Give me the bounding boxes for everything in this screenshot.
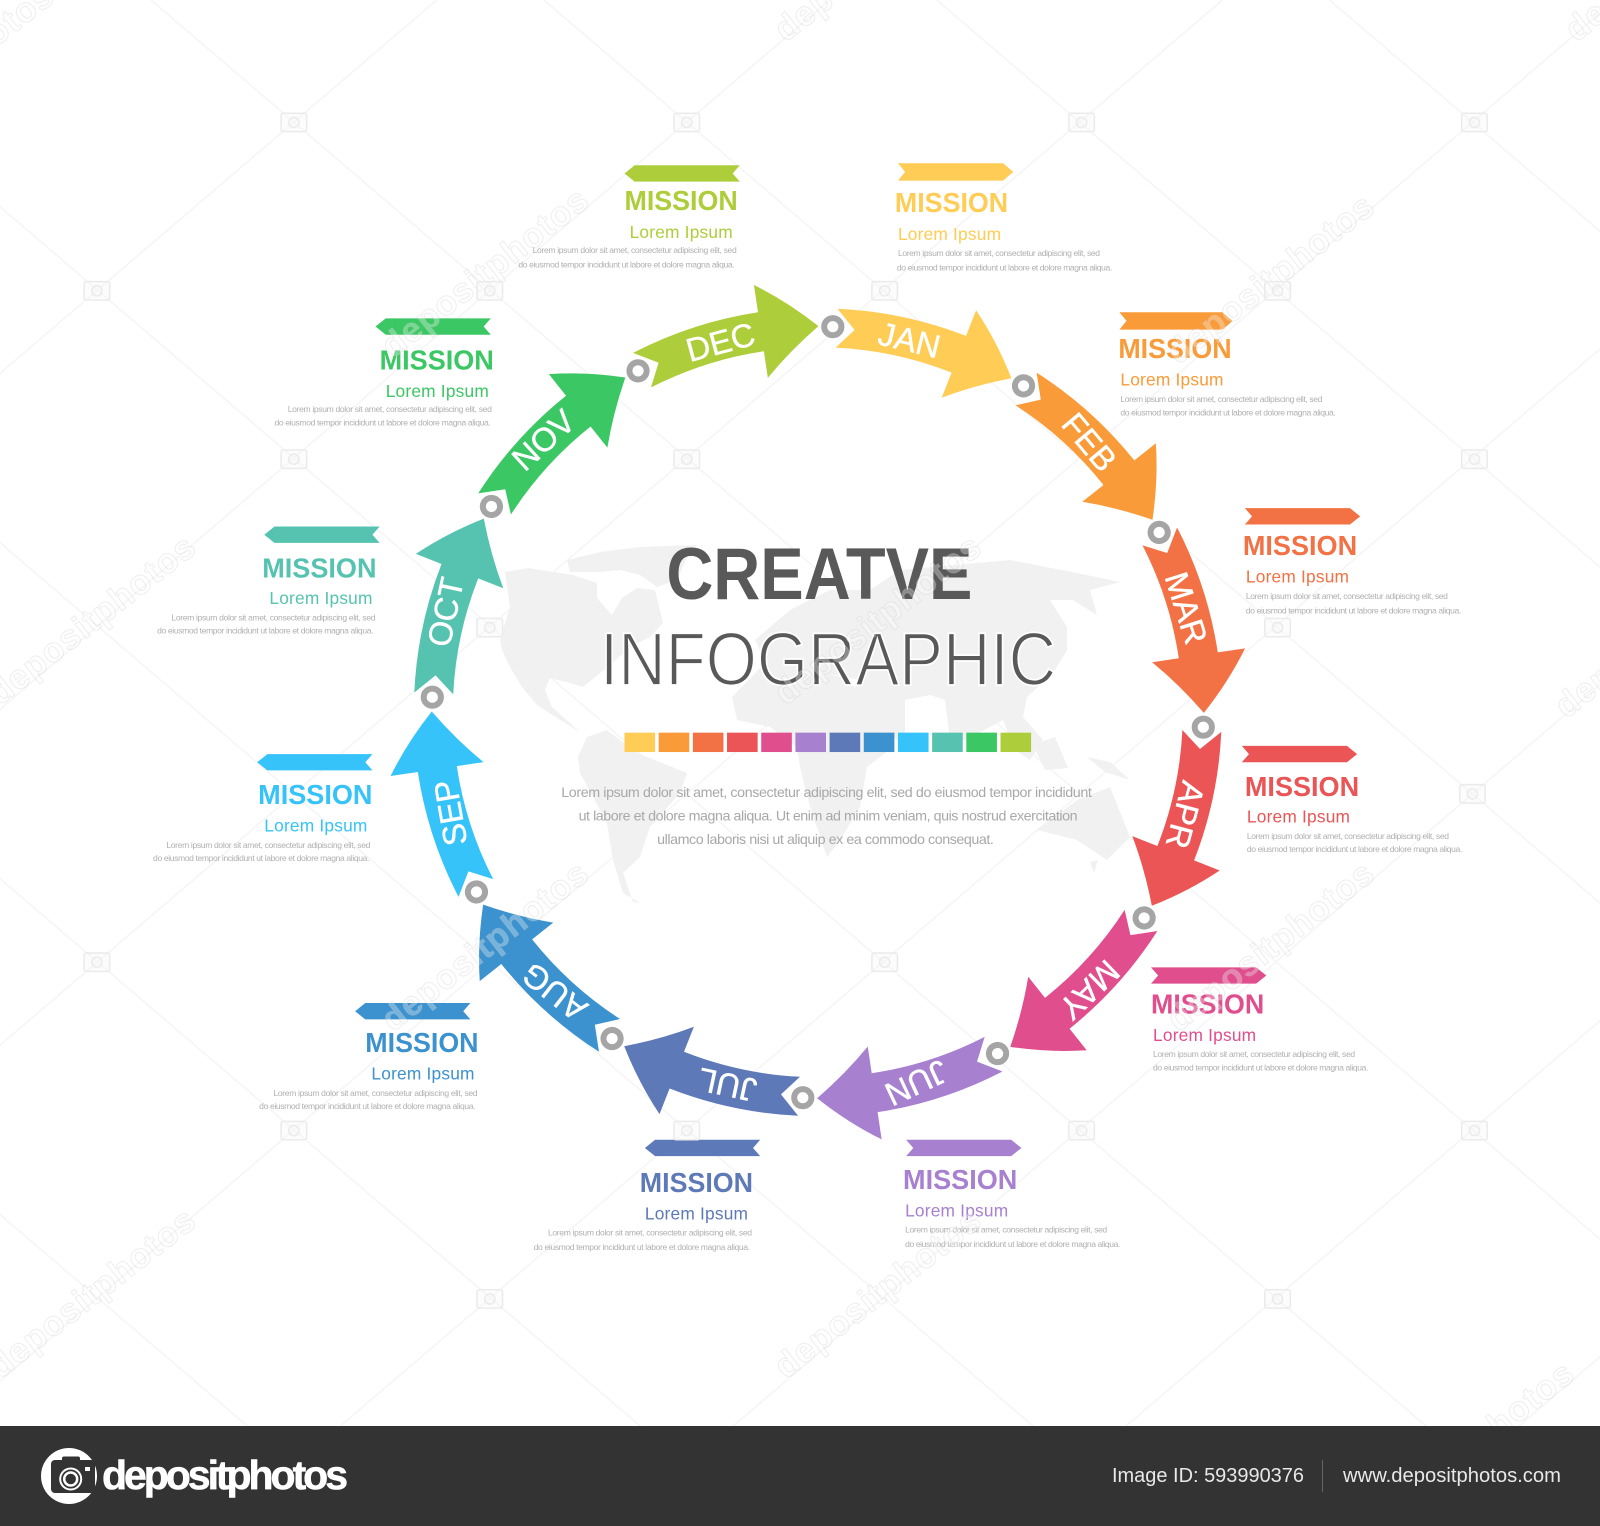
panel: SEP mission <box>153 754 372 863</box>
arrow: APR <box>1132 719 1221 906</box>
panel: JUL mission <box>534 1140 760 1252</box>
title: INFOGRAPHIC: INFOGRAPHIC <box>600 617 1056 701</box>
panel: APR mission <box>1242 746 1462 854</box>
panel: MAY mission: do eiusmod tempor incididunt ut labore et dolore magna aliqua. <box>1153 1062 1368 1072</box>
arrow: OCT <box>414 519 503 706</box>
panel: MAR mission <box>1243 508 1461 615</box>
panel: OCT mission: Lorem ipsum dolor sit amet, consectetur adipiscing elit, sed <box>171 612 376 622</box>
panel: FEB mission <box>1118 312 1336 417</box>
panel: MAY mission <box>1151 967 1368 1072</box>
title: CREATVE: CREATVE <box>666 532 972 615</box>
logo icon <box>41 1448 97 1504</box>
panel: FEB mission: Lorem Ipsum <box>1120 370 1223 390</box>
arrow: MAR: MAR <box>1158 567 1215 649</box>
arrow: MAY: MAY <box>1052 953 1127 1027</box>
panel: MAR mission: do eiusmod tempor incididunt ut labore et dolore magna aliqua. <box>1246 605 1461 615</box>
panel: APR mission: Lorem Ipsum <box>1247 806 1350 826</box>
watermark text: depositphotos <box>767 528 988 712</box>
arrow: JUL: JUL <box>695 1061 760 1109</box>
arrow: DEC <box>622 266 828 437</box>
panel: MAY mission: Lorem ipsum dolor sit amet, consectetur adipiscing elit, sed <box>1153 1049 1355 1059</box>
arrow: NOV: NOV <box>505 402 582 478</box>
panel: FEB mission: Lorem ipsum dolor sit amet, consectetur adipiscing elit, sed <box>1120 394 1323 404</box>
arrow: DEC: DEC <box>682 315 759 369</box>
panel: DEC mission: Lorem ipsum dolor sit amet, consectetur adipiscing elit, sed <box>533 245 737 255</box>
colour swatch strip <box>624 733 1031 752</box>
arrow: SEP <box>372 702 542 908</box>
arrow: FEB: FEB <box>1055 406 1124 478</box>
panel: OCT mission: MISSION <box>262 553 377 584</box>
arrow: SEP: SEP <box>426 777 474 849</box>
arrow: APR: APR <box>1159 777 1212 853</box>
panel: NOV mission: Lorem ipsum dolor sit amet, consectetur adipiscing elit, sed <box>288 404 492 414</box>
panel: DEC mission: MISSION <box>624 185 738 216</box>
arrow: NOV <box>472 343 642 549</box>
panel: JUN mission: MISSION <box>903 1164 1017 1195</box>
panel: OCT mission: Lorem Ipsum <box>269 588 372 608</box>
panel: MAR mission: Lorem Ipsum <box>1246 567 1349 587</box>
watermark cameras <box>84 113 1487 1308</box>
panel: SEP mission: Lorem Ipsum <box>264 816 367 836</box>
centre paragraph: ut labore et dolore magna aliqua. Ut enim ad minim veniam, quis nostrud exercitation <box>579 808 1078 824</box>
arrow: JUL <box>624 1027 811 1116</box>
arrow: MAY <box>993 875 1164 1082</box>
watermark text: depositphotos <box>374 181 596 365</box>
panel: FEB mission: MISSION <box>1118 333 1232 364</box>
panel: APR mission: MISSION <box>1245 771 1359 802</box>
arrow: JAN <box>824 309 1011 398</box>
panel: FEB mission: do eiusmod tempor incididunt ut labore et dolore magna aliqua. <box>1120 407 1336 417</box>
centre paragraph: Lorem ipsum dolor sit amet, consectetur adipiscing elit, sed do eiusmod tempor incididunt <box>561 785 1092 801</box>
panel: DEC mission: do eiusmod tempor incididunt ut labore et dolore magna aliqua. <box>518 259 735 269</box>
panel: JAN mission: Lorem ipsum dolor sit amet, consectetur adipiscing elit, sed <box>898 248 1100 258</box>
panel: AUG mission: MISSION <box>365 1027 479 1058</box>
panel: JAN mission: Lorem Ipsum <box>898 224 1001 244</box>
panel: NOV mission <box>274 318 494 428</box>
panel: JUL mission: Lorem Ipsum <box>645 1203 748 1223</box>
panel: NOV mission: do eiusmod tempor incididunt ut labore et dolore magna aliqua. <box>274 418 491 428</box>
arrow: JUN <box>807 988 1014 1158</box>
panel: JAN mission <box>895 163 1112 272</box>
panel: MAR mission: MISSION <box>1243 530 1357 561</box>
arrow: MAR <box>1093 516 1264 723</box>
arrow: AUG: AUG <box>515 955 594 1029</box>
panel: DEC mission: Lorem Ipsum <box>630 222 733 242</box>
panel: NOV mission: MISSION <box>380 344 494 375</box>
panel: AUG mission: Lorem ipsum dolor sit amet, consectetur adipiscing elit, sed <box>273 1088 478 1098</box>
panel: MAR mission: Lorem ipsum dolor sit amet, consectetur adipiscing elit, sed <box>1246 591 1448 601</box>
arrow: FEB <box>981 366 1187 537</box>
watermark text: depositphotos <box>1160 854 1381 1039</box>
panel: OCT mission: do eiusmod tempor incididunt ut labore et dolore magna aliqua. <box>157 626 373 636</box>
panel: MAY mission: Lorem Ipsum <box>1153 1025 1256 1045</box>
centre paragraph <box>561 785 1092 848</box>
panel: JUL mission: do eiusmod tempor incididunt ut labore et dolore magna aliqua. <box>534 1242 750 1252</box>
panel: SEP mission: do eiusmod tempor incididunt ut labore et dolore magna aliqua. <box>153 853 369 863</box>
panel: JAN mission: do eiusmod tempor incididunt ut labore et dolore magna aliqua. <box>897 262 1112 272</box>
panel: JUN mission: Lorem Ipsum <box>905 1200 1008 1220</box>
panel: NOV mission: Lorem Ipsum <box>386 381 489 401</box>
footer bar <box>0 1426 1600 1526</box>
panel: SEP mission: Lorem ipsum dolor sit amet, consectetur adipiscing elit, sed <box>166 840 371 850</box>
panel: SEP mission: MISSION <box>258 779 372 810</box>
centre paragraph: ullamco laboris nisi ut aliquip ex ea commodo consequat. <box>657 832 994 848</box>
panel: JUL mission: Lorem ipsum dolor sit amet, consectetur adipiscing elit, sed <box>548 1228 752 1238</box>
panel: JUN mission <box>903 1140 1120 1249</box>
panel: JAN mission: MISSION <box>895 187 1008 218</box>
arrow ring <box>372 266 1264 1158</box>
arrow: OCT: OCT <box>420 574 471 650</box>
panel: AUG mission: Lorem Ipsum <box>371 1064 474 1084</box>
watermark text: depositphotos <box>1160 187 1381 372</box>
panel: APR mission: do eiusmod tempor incididunt ut labore et dolore magna aliqua. <box>1247 844 1462 854</box>
panel: AUG mission: do eiusmod tempor incididunt ut labore et dolore magna aliqua. <box>259 1101 476 1111</box>
watermark text: depositphotos <box>767 1201 988 1386</box>
image id: Image ID: 593990376 <box>1112 1465 1304 1487</box>
world map background <box>500 545 1130 903</box>
logo wordmark: depositphotos <box>102 1452 348 1498</box>
arrow: JAN: JAN <box>875 315 944 365</box>
arrow: JUN: JUN <box>880 1053 953 1113</box>
panel: OCT mission <box>157 527 380 636</box>
panel: APR mission: Lorem ipsum dolor sit amet, consectetur adipiscing elit, sed <box>1247 831 1449 841</box>
website: www.depositphotos.com <box>1342 1465 1561 1487</box>
panel: AUG mission <box>259 1003 479 1111</box>
panel: DEC mission <box>518 165 740 269</box>
panel: JUN mission: do eiusmod tempor incididunt ut labore et dolore magna aliqua. <box>905 1239 1120 1249</box>
watermark text: depositphotos <box>374 854 596 1039</box>
panel: MAY mission: MISSION <box>1151 988 1264 1019</box>
panel: JUL mission: MISSION <box>640 1167 753 1198</box>
arrow: AUG <box>448 888 655 1058</box>
panel: JUN mission: Lorem ipsum dolor sit amet, consectetur adipiscing elit, sed <box>905 1225 1107 1235</box>
